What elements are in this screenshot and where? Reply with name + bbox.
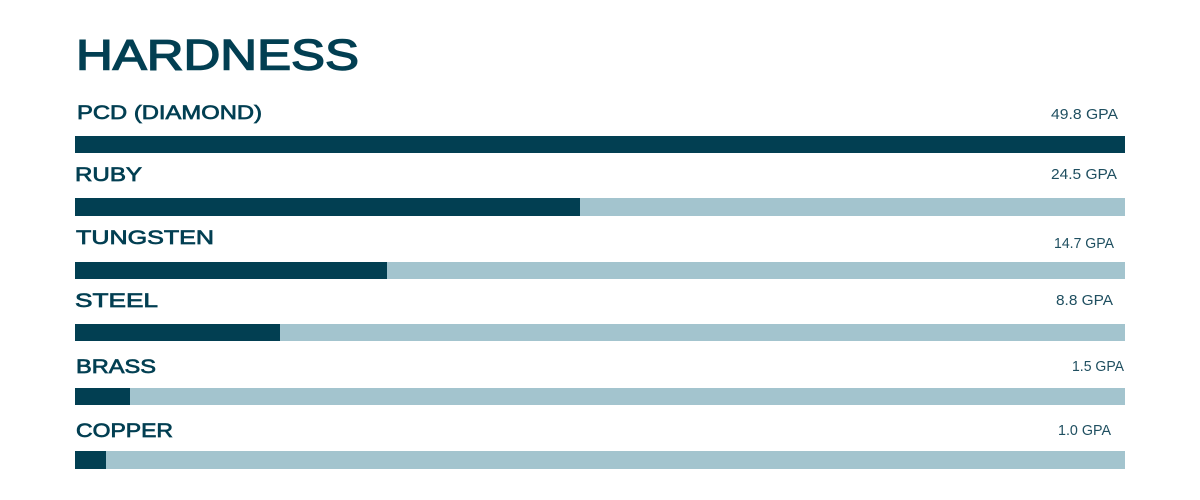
row: PCD (diamond): PCD (DIAMOND) (77, 102, 262, 124)
row: brass (75, 356, 1125, 405)
row: copper: COPPER (76, 420, 173, 442)
row: steel (75, 290, 1125, 341)
row: ruby (75, 164, 1125, 216)
row: tungsten: 14.7 GPA (1054, 235, 1114, 252)
row: steel: STEEL (75, 290, 158, 312)
row: PCD (diamond) (75, 102, 1125, 153)
row: brass: BRASS (76, 356, 156, 378)
row: tungsten: TUNGSTEN (76, 227, 214, 249)
row: ruby: 24.5 GPA (1051, 166, 1117, 183)
title: HARDNESS (76, 32, 359, 80)
row: brass: 1.5 GPA (1072, 358, 1124, 375)
row: copper: 1.0 GPA (1058, 422, 1111, 439)
row: copper (75, 420, 1125, 469)
row: PCD (diamond): 49.8 GPA (1051, 106, 1118, 123)
row: ruby: RUBY (75, 164, 142, 186)
row: steel: 8.8 GPA (1056, 292, 1113, 309)
row: tungsten (75, 227, 1125, 279)
